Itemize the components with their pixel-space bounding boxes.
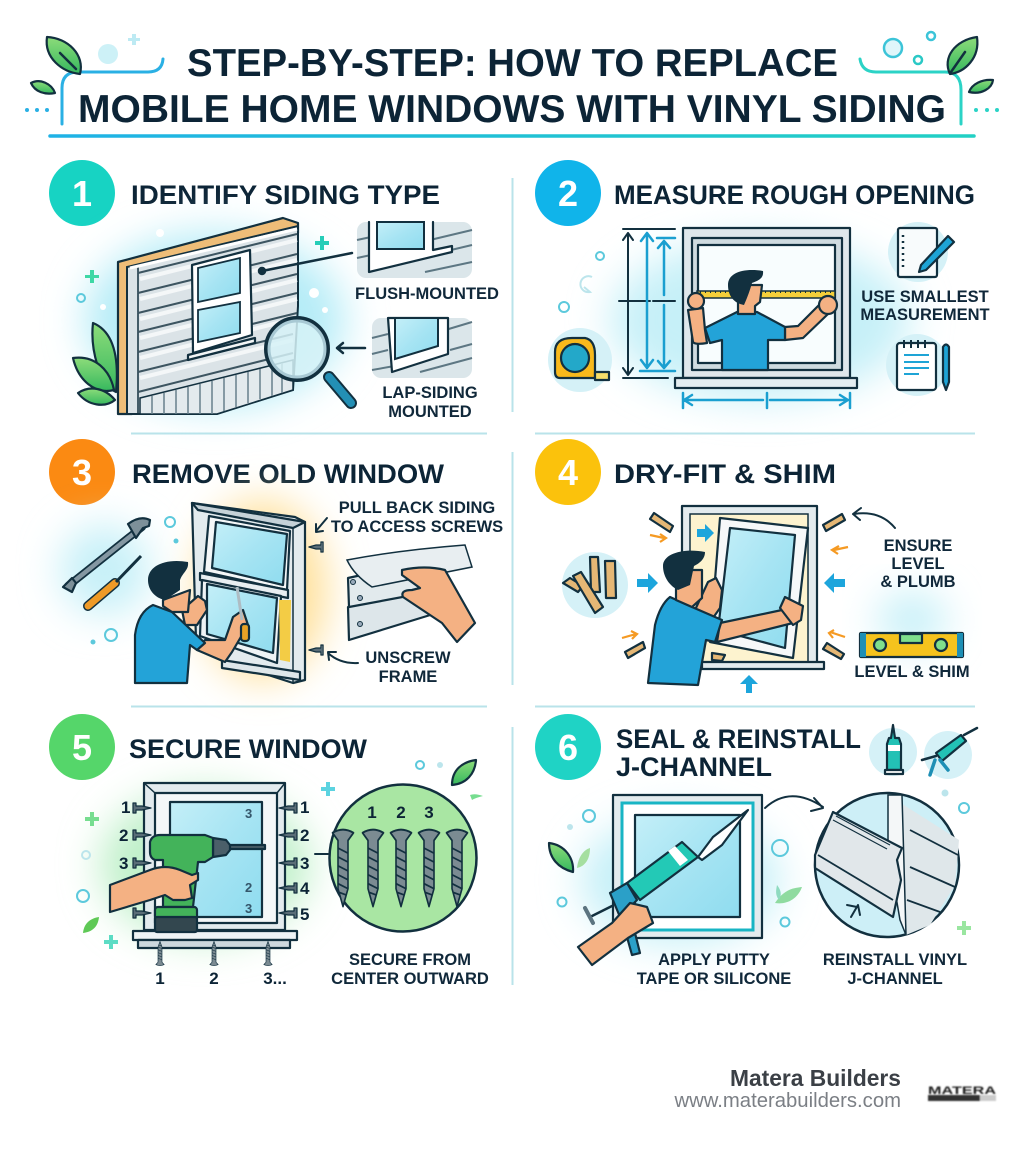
icon: screws detail circle: 1 <box>367 803 377 822</box>
vertical measurement arrows <box>619 229 675 378</box>
panel: step 5 secure window <box>49 714 489 988</box>
icon: glue tube <box>869 725 917 776</box>
step number 3: 3 <box>72 452 92 493</box>
step number 4 <box>535 439 601 505</box>
label: reinstall vinyl j-channel <box>823 951 967 988</box>
label: level and shim: LEVEL & SHIM <box>854 663 970 681</box>
step number 3 <box>49 439 115 505</box>
label: flush-mounted: FLUSH-MOUNTED <box>355 285 499 303</box>
illustration: window opening with person measuring <box>675 228 857 408</box>
step number 4: 4 <box>558 452 578 493</box>
illustration: person holding window <box>648 551 803 685</box>
label: apply putty tape or silicone: APPLY PUTTY <box>658 951 770 969</box>
inset: lap-siding mounted <box>372 318 472 378</box>
bottom screws with numbers: 2 <box>209 969 219 988</box>
icon: notepad and pen <box>886 334 949 396</box>
illustration: person with screwdriver <box>135 561 249 683</box>
label: secure from center outward: SECURE FROM <box>349 951 471 969</box>
title banner <box>25 32 999 136</box>
icon: tape measure <box>548 328 612 392</box>
panel: step 6 seal and reinstall j-channel <box>535 714 977 988</box>
label: unscrew frame: UNSCREW <box>365 649 451 667</box>
illustration: j-channel detail circle <box>815 793 959 937</box>
heading: seal and reinstall j-channel <box>616 724 861 782</box>
icon: caulk gun <box>922 728 977 779</box>
step number 6 <box>535 714 601 780</box>
heading: seal and reinstall j-channel: J-CHANNEL <box>616 752 772 782</box>
pointer arrows <box>259 253 365 353</box>
panel: step 4 dry-fit and shim <box>535 439 970 693</box>
title text: STEP-BY-STEP: HOW TO REPLACE <box>187 42 838 85</box>
logo: MATERA <box>928 1085 996 1097</box>
title banner: MOBILE HOME WINDOWS WITH VINYL SIDING <box>78 88 946 131</box>
label: ensure level and plumb: ENSURE <box>884 537 952 555</box>
label: lap-siding mounted: LAP-SIDING <box>382 384 478 402</box>
bottom screws with numbers: 1 <box>155 969 165 988</box>
label: apply putty tape or silicone: TAPE OR SILICONE <box>637 970 791 988</box>
bottom screws with numbers: 3... <box>263 969 287 988</box>
footer: brand: www.materabuilders.com <box>673 1090 901 1112</box>
heading: seal and reinstall j-channel: SEAL & REINSTALL <box>616 724 861 754</box>
logo <box>928 1085 996 1101</box>
label: ensure level and plumb <box>880 537 956 591</box>
panel: step 2 measure rough opening <box>535 160 990 408</box>
screw numbers right: 1 <box>300 798 309 817</box>
label: reinstall vinyl j-channel: J-CHANNEL <box>847 970 943 988</box>
label: use smallest measurement: MEASUREMENT <box>860 306 990 324</box>
step number 2: 2 <box>558 173 578 214</box>
label: reinstall vinyl j-channel: REINSTALL VINYL <box>823 951 967 969</box>
label: ensure level and plumb: & PLUMB <box>880 573 956 591</box>
label: lap-siding mounted: MOUNTED <box>388 403 472 421</box>
step number 5 <box>49 714 115 780</box>
step number 2 <box>535 160 601 226</box>
icon: leaves <box>73 323 117 405</box>
illustration: siding pulled back by hand <box>347 545 475 642</box>
label: unscrew frame <box>365 649 451 686</box>
footer: brand: Matera Builders <box>730 1065 901 1091</box>
panel: step 3 remove old window <box>49 439 503 686</box>
illustration: caulk gun and hand <box>578 810 748 965</box>
screw numbers right: 3 <box>300 854 309 873</box>
screw numbers right <box>245 798 310 924</box>
label: secure from center outward: CENTER OUTWARD <box>331 970 489 988</box>
heading: secure window: SECURE WINDOW <box>129 734 368 764</box>
label: pull back siding: TO ACCESS SCREWS <box>331 518 503 536</box>
panel: step 1 identify siding type <box>49 160 499 421</box>
step number 6: 6 <box>558 727 578 768</box>
illustration: window frame and tilted sash <box>682 506 824 669</box>
illustration: window <box>133 783 297 948</box>
icon: notebook and pen <box>888 222 954 282</box>
step number 1: 1 <box>72 173 92 214</box>
label: pull back siding <box>331 499 503 536</box>
label: pull back siding: PULL BACK SIDING <box>339 499 495 517</box>
label: apply putty tape or silicone <box>637 951 791 988</box>
icon: magnifying glass <box>267 319 351 403</box>
shims and direction arrows <box>622 508 895 693</box>
heading: measure rough opening: MEASURE ROUGH OPENING <box>614 180 975 210</box>
footer: brand <box>673 1065 996 1112</box>
screw numbers right: 4 <box>300 879 310 898</box>
label: use smallest measurement <box>860 288 990 324</box>
step number 5: 5 <box>72 727 92 768</box>
heading: identify siding type: IDENTIFY SIDING TYPE <box>131 180 440 210</box>
bottom screws with numbers <box>155 941 287 988</box>
label: secure from center outward <box>331 951 489 988</box>
icon: screws detail circle: 2 <box>396 803 406 822</box>
step number 1 <box>49 160 115 226</box>
label: lap-siding mounted <box>382 384 478 421</box>
label: ensure level and plumb: LEVEL <box>891 555 945 573</box>
illustration: sided wall with window <box>118 218 298 414</box>
screw numbers right: 3 <box>245 901 252 916</box>
icon: screws detail circle: 3 <box>424 803 434 822</box>
screw numbers right: 2 <box>245 880 252 895</box>
arrow to j-channel <box>765 796 823 811</box>
illustration: window being removed <box>192 503 305 683</box>
illustration: window frame <box>613 795 762 938</box>
label: unscrew frame: FRAME <box>379 668 437 686</box>
screw numbers left: 3 <box>119 854 128 873</box>
heading: remove old window: REMOVE OLD WINDOW <box>132 459 445 489</box>
screw numbers right: 2 <box>300 826 309 845</box>
inset: flush-mounted <box>357 222 472 278</box>
screw numbers right: 5 <box>300 905 309 924</box>
icon: screws detail circle <box>315 784 476 932</box>
screw numbers right: 3 <box>245 806 252 821</box>
heading: dry-fit and shim: DRY-FIT & SHIM <box>614 459 836 489</box>
screw numbers left: 2 <box>119 826 128 845</box>
screw numbers left: 1 <box>121 798 130 817</box>
label: use smallest measurement: USE SMALLEST <box>861 288 989 306</box>
icon: pry bar and screwdriver <box>63 518 150 606</box>
icon: wood shims <box>562 552 628 618</box>
screw numbers left <box>119 798 151 918</box>
screws and arrows <box>309 518 358 663</box>
icon: spirit level <box>860 633 963 657</box>
illustration: hand with green drill <box>110 835 265 932</box>
